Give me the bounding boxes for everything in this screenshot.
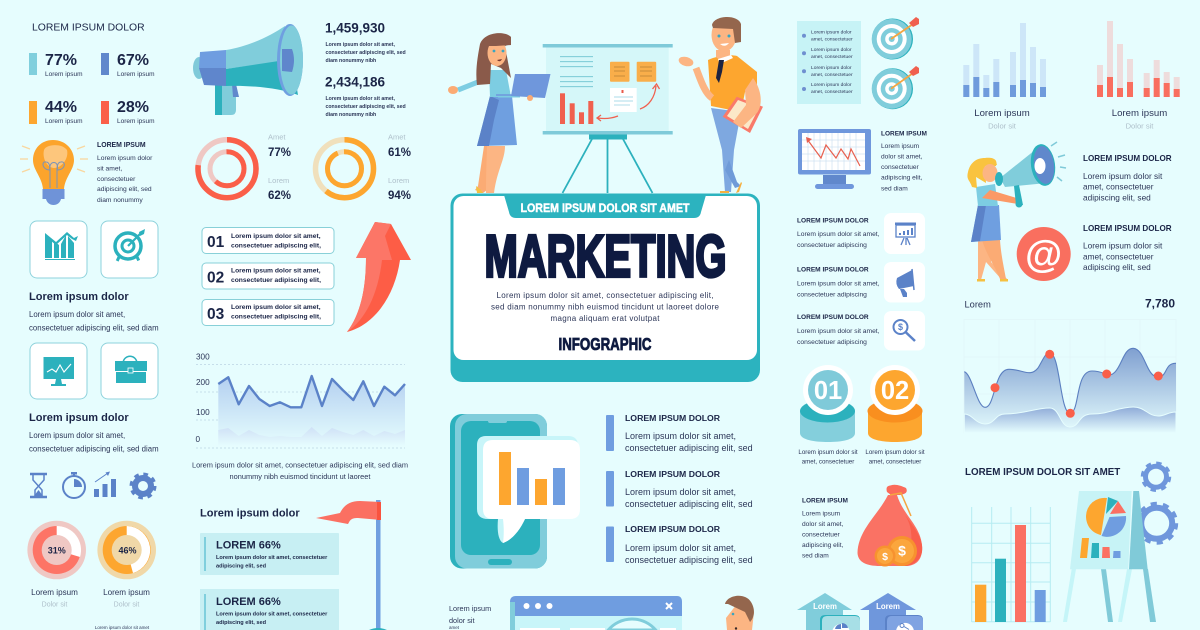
chart: red bars: Lorem ipsum bbox=[1112, 108, 1167, 119]
illustration: woman with megaphone bbox=[967, 142, 1066, 282]
text item 2: Lorem ipsum dolor sit amet, bbox=[625, 487, 736, 497]
text: right block 1 bbox=[1083, 154, 1172, 202]
label: lorem value: 7,780 bbox=[1145, 296, 1175, 310]
text: line chart caption: nonummy nibh euismod tincidunt ut laoreet bbox=[230, 472, 370, 481]
text: lorem ipsum dolor block 2: Lorem ipsum dolor sit amet, bbox=[29, 431, 125, 440]
heading: MARKETING: MARKETING bbox=[484, 222, 726, 290]
donut: 46%: Lorem ipsum bbox=[103, 588, 150, 597]
text: row 3: LOREM IPSUM DOLOR bbox=[797, 314, 869, 321]
icon: large megaphone bbox=[193, 24, 303, 115]
text: row 3: consectetuer adipiscing bbox=[797, 339, 867, 346]
badge: 02: amet, consectetuer bbox=[869, 458, 921, 466]
icon: house right bbox=[860, 593, 923, 630]
icon: hourglass bbox=[30, 474, 47, 497]
callout: lorem 66% second: LOREM 66% bbox=[216, 596, 281, 608]
badge: 01 bbox=[798, 365, 858, 466]
text item 1 bbox=[606, 413, 753, 453]
text: right block 2: adipiscing elit, sed bbox=[1083, 262, 1151, 272]
text: right block 2: LOREM IPSUM DOLOR bbox=[1083, 224, 1172, 233]
panel: key percentages bbox=[29, 22, 155, 125]
stat: 1,459,930: diam nonummy nibh bbox=[326, 58, 376, 64]
text: lorem ipsum monitor: sed diam bbox=[881, 186, 908, 192]
text item 2: consectetuer adipiscing elit, sed bbox=[625, 499, 753, 509]
text: right block 2: Lorem ipsum dolor sit bbox=[1083, 240, 1163, 250]
heading: INFOGRAPHIC: INFOGRAPHIC bbox=[558, 334, 652, 354]
donut: 46%: Dolor sit bbox=[114, 602, 139, 608]
text: lorem ipsum dolor block 2: consectetuer adipiscing elit, sed diam bbox=[29, 444, 159, 454]
list: bullet panel: Lorem ipsum dolor bbox=[811, 30, 852, 36]
text: lorem ipsum money: Lorem ipsum bbox=[802, 510, 841, 518]
badge: 01: Lorem ipsum dolor sit bbox=[798, 449, 858, 456]
text: lorem ipsum money: adipiscing elit, bbox=[802, 542, 844, 549]
stat 67% bbox=[101, 52, 155, 78]
text: lorem ipsum monitor: LOREM IPSUM bbox=[881, 130, 927, 138]
text: lorem ipsum bulb: diam nonummy bbox=[97, 197, 143, 204]
chart: line chart: 200 bbox=[196, 378, 210, 387]
text: lorem ipsum dolor block 2: Lorem ipsum dolor bbox=[29, 412, 129, 424]
icon: gear bbox=[132, 474, 154, 498]
list: bullet panel: amet, consectetuer bbox=[811, 54, 853, 60]
text: lorem ipsum money: consectetuer bbox=[802, 532, 841, 538]
donut: 46%: 46% bbox=[118, 546, 137, 556]
text: lorem ipsum monitor: dolor sit amet, bbox=[881, 154, 923, 160]
icon: rising bars bbox=[94, 472, 116, 497]
text: description: Lorem ipsum dolor sit amet, consectetuer adipiscing elit, bbox=[496, 291, 714, 300]
list: bullet panel: Lorem ipsum dolor bbox=[811, 82, 852, 88]
text: lorem ipsum bulb: Lorem ipsum dolor bbox=[97, 155, 153, 162]
text: lorem ipsum dolor block 2 bbox=[29, 412, 159, 454]
text: bottom lorem: Lorem ipsum bbox=[449, 604, 491, 613]
arrow: rising red bbox=[347, 222, 411, 332]
labels: red donut bbox=[268, 132, 291, 202]
text: row 2 bbox=[797, 266, 880, 298]
text item 1: Lorem ipsum dolor sit amet, bbox=[625, 431, 736, 441]
illustration: woman with laptop bbox=[448, 33, 550, 193]
icon: at sign bbox=[1017, 227, 1071, 281]
text: row 2: consectetuer adipiscing bbox=[797, 292, 867, 298]
illustration: easel with pie chart bbox=[1063, 491, 1156, 622]
list item 01 bbox=[202, 228, 334, 254]
text: row 1: Lorem ipsum dolor sit amet, bbox=[797, 231, 880, 238]
heading: lorem ipsum dolor sit amet: LOREM IPSUM DOLOR SIT AMET bbox=[965, 467, 1120, 478]
text: lorem ipsum monitor: Lorem ipsum bbox=[881, 143, 920, 150]
stat: 1,459,930: consectetuer adipiscing elit, sed bbox=[326, 50, 406, 56]
label: lorem value: Lorem bbox=[964, 300, 991, 310]
illustration: presentation board bbox=[543, 44, 673, 193]
text: lorem ipsum monitor: consectetuer bbox=[881, 164, 920, 171]
list item 03 bbox=[202, 300, 334, 326]
stat 28%: 28% bbox=[117, 99, 149, 116]
icon card: dollar magnifier bbox=[884, 311, 925, 350]
donut: 31%: Lorem ipsum bbox=[31, 588, 78, 597]
list: bullet panel: Lorem ipsum dolor bbox=[811, 47, 852, 53]
list item 03: Lorem ipsum dolor sit amet, bbox=[231, 304, 321, 311]
text: lorem ipsum bulb: adipiscing elit, sed bbox=[97, 186, 152, 193]
text: lorem ipsum monitor bbox=[881, 130, 927, 192]
text: row 2: LOREM IPSUM DOLOR bbox=[797, 266, 869, 274]
icon card: briefcase bbox=[101, 343, 158, 399]
text: lorem ipsum money: sed diam bbox=[802, 552, 829, 560]
list item 03: 03 bbox=[207, 306, 225, 323]
list: bullet panel: amet, consectetuer bbox=[811, 36, 853, 42]
chart: line chart: 0 bbox=[196, 435, 200, 444]
text: lorem ipsum monitor: adipiscing elit, bbox=[881, 174, 923, 182]
text: right block 1: LOREM IPSUM DOLOR bbox=[1083, 154, 1172, 163]
callout: lorem 66% first: LOREM 66% bbox=[216, 540, 281, 552]
icon: money bag bbox=[858, 485, 922, 566]
icon: house left: Lorem bbox=[813, 602, 837, 611]
icon: dartboard bottom bbox=[872, 66, 919, 109]
text item 1: LOREM IPSUM DOLOR bbox=[625, 413, 721, 423]
list item 01: Lorem ipsum dolor sit amet, bbox=[231, 233, 321, 240]
icon: money bag: $ bbox=[882, 551, 888, 563]
banner: subtitle ribbon bbox=[504, 195, 706, 218]
illustration: man with book bbox=[678, 17, 763, 193]
list item 02 bbox=[202, 263, 334, 289]
icon card: megaphone bbox=[884, 262, 925, 302]
illustration: man head bbox=[725, 596, 754, 630]
list: bullet panel: amet, consectetuer bbox=[811, 72, 853, 78]
text: row 3: Lorem ipsum dolor sit amet, bbox=[797, 328, 880, 335]
text item 3: LOREM IPSUM DOLOR bbox=[625, 524, 721, 534]
stat 28%: Lorem ipsum bbox=[117, 118, 155, 125]
text: bottom lorem: dolor sit bbox=[449, 616, 475, 625]
text item 3: consectetuer adipiscing elit, sed bbox=[625, 555, 753, 565]
icon: phone with chart bubble bbox=[450, 414, 580, 568]
chart: red bars bbox=[1097, 21, 1180, 130]
badge: 02: 02 bbox=[881, 377, 909, 405]
labels: orange donut: 94% bbox=[388, 190, 411, 202]
chart: smooth area with markers bbox=[964, 320, 1176, 433]
stat 44%: 44% bbox=[45, 99, 77, 116]
chart: blue bars: Dolor sit bbox=[988, 122, 1017, 130]
illustration: browser window bbox=[510, 596, 682, 630]
text: row 1: consectetuer adipiscing bbox=[797, 242, 867, 249]
text: description: sed diam nonummy nibh euismod tincidunt ut laoreet dolore bbox=[491, 302, 720, 312]
text: lorem ipsum bulb: consectetuer bbox=[97, 176, 136, 183]
chart: red concentric donut bbox=[198, 140, 256, 198]
stat: 1,459,930 bbox=[325, 20, 406, 64]
text item 3 bbox=[606, 524, 753, 565]
text: description bbox=[491, 291, 720, 323]
stat: 2,434,186: Lorem ipsum dolor sit amet, bbox=[326, 96, 396, 102]
list: bullet panel: Lorem ipsum dolor bbox=[811, 65, 852, 71]
text: line chart caption: Lorem ipsum dolor sit amet, consectetuer adipiscing elit, sed diam bbox=[192, 460, 408, 470]
stat: 2,434,186: 2,434,186 bbox=[325, 74, 386, 90]
text: lorem ipsum money: LOREM IPSUM bbox=[802, 498, 848, 504]
icon: stopwatch bbox=[63, 472, 85, 498]
callout: lorem 66% first: Lorem ipsum dolor sit amet, consectetuer bbox=[216, 555, 328, 561]
list item 02: consectetuer adipiscing elit, bbox=[231, 277, 321, 284]
icon: light bulb bbox=[20, 140, 88, 205]
stat 77%: 77% bbox=[45, 52, 77, 69]
callout: lorem 66% first bbox=[200, 533, 339, 575]
stat 77% bbox=[29, 52, 83, 78]
labels: orange donut: Lorem bbox=[388, 176, 409, 185]
stat: 1,459,930: 1,459,930 bbox=[325, 20, 385, 36]
stat 67%: Lorem ipsum bbox=[117, 71, 155, 78]
text: lorem ipsum bulb: LOREM IPSUM bbox=[97, 142, 146, 149]
text: lorem ipsum bulb bbox=[97, 142, 153, 204]
text: row 1: LOREM IPSUM DOLOR bbox=[797, 218, 869, 224]
labels: orange donut bbox=[388, 132, 411, 202]
text: bottom lorem: amet bbox=[449, 625, 460, 630]
stat 77%: Lorem ipsum bbox=[45, 71, 83, 78]
icon row: time and tools bbox=[30, 472, 154, 498]
text: lorem ipsum dolor block 1 bbox=[29, 291, 159, 332]
text: clipped caption: Lorem ipsum dolor sit amet bbox=[95, 625, 150, 630]
text: row 2: Lorem ipsum dolor sit amet, bbox=[797, 280, 880, 288]
donut: 31% bbox=[27, 521, 86, 608]
callout: lorem 66% second: Lorem ipsum dolor sit amet, consectetuer bbox=[216, 612, 328, 618]
stat: 2,434,186 bbox=[325, 74, 406, 118]
list item 01: 01 bbox=[207, 234, 225, 251]
donut: 46% bbox=[97, 521, 156, 608]
icon card: presentation bbox=[884, 213, 925, 254]
icon: flag on pole bbox=[316, 500, 387, 630]
callout: lorem 66% second: adipiscing elit, sed bbox=[216, 620, 267, 626]
chart: blue bars: Lorem ipsum bbox=[974, 108, 1030, 119]
text item 1: consectetuer adipiscing elit, sed bbox=[625, 443, 753, 453]
stat: 1,459,930: Lorem ipsum dolor sit amet, bbox=[326, 42, 396, 48]
text: line chart caption bbox=[192, 460, 408, 481]
chart: blue bars bbox=[963, 23, 1046, 130]
text: lorem ipsum bulb: sit amet, bbox=[97, 166, 122, 172]
labels: red donut: Lorem bbox=[268, 176, 289, 185]
text: right block 2: amet, consectetuer bbox=[1083, 252, 1154, 262]
heading: flag section: Lorem ipsum dolor bbox=[200, 508, 300, 520]
labels: red donut: Amet bbox=[268, 132, 286, 142]
labels: orange donut: 61% bbox=[388, 147, 411, 159]
icon card: growth chart bbox=[30, 221, 87, 278]
callout: lorem 66% first: adipiscing elit, sed bbox=[216, 564, 267, 570]
labels: red donut: 77% bbox=[268, 147, 291, 159]
list: bullet panel bbox=[797, 21, 861, 104]
icon: monitor with falling chart bbox=[798, 129, 871, 189]
chart: line chart bbox=[196, 352, 405, 448]
stat: 2,434,186: consectetuer adipiscing elit, sed bbox=[326, 104, 406, 110]
badge: 01: 01 bbox=[814, 377, 842, 405]
list item 01: consectetuer adipiscing elit, bbox=[231, 242, 321, 250]
text: lorem ipsum dolor block 1: consectetuer adipiscing elit, sed diam bbox=[29, 324, 159, 332]
icon: house left bbox=[797, 593, 860, 630]
labels: red donut: 62% bbox=[268, 190, 291, 202]
list item 03: consectetuer adipiscing elit, bbox=[231, 314, 321, 320]
text: right block 1: amet, consectetuer bbox=[1083, 182, 1154, 192]
chart: line chart: 300 bbox=[196, 352, 210, 362]
text: right block 1: Lorem ipsum dolor sit bbox=[1083, 171, 1163, 181]
text: lorem ipsum money: dolor sit amet, bbox=[802, 521, 844, 528]
icon: money bag: $ bbox=[898, 542, 906, 558]
list item 02: Lorem ipsum dolor sit amet, bbox=[231, 268, 321, 274]
icon: at sign: @ bbox=[1025, 234, 1062, 276]
text: right block 1: adipiscing elit, sed bbox=[1083, 192, 1151, 202]
icon: dartboard top bbox=[872, 17, 919, 60]
icon card: dollar magnifier: $ bbox=[898, 322, 903, 332]
heading: lorem ipsum dolor: LOREM IPSUM DOLOR bbox=[32, 22, 145, 34]
stat: 2,434,186: diam nonummy nibh bbox=[326, 112, 376, 118]
badge: 02: Lorem ipsum dolor sit bbox=[865, 449, 925, 456]
text: lorem ipsum dolor block 1: Lorem ipsum dolor sit amet, bbox=[29, 310, 125, 319]
banner: subtitle ribbon: LOREM IPSUM DOLOR SIT AMET bbox=[520, 201, 690, 215]
text: lorem ipsum money bbox=[802, 498, 848, 560]
badge: 02 bbox=[865, 365, 925, 466]
chart: red bars: Dolor sit bbox=[1126, 122, 1154, 130]
stat 44%: Lorem ipsum bbox=[45, 118, 83, 125]
text: right block 2 bbox=[1083, 224, 1172, 272]
callout: lorem 66% second bbox=[200, 589, 339, 630]
text item 2: LOREM IPSUM DOLOR bbox=[625, 469, 721, 479]
donut: 31%: 31% bbox=[48, 546, 66, 556]
list: bullet panel: amet, consectetuer bbox=[811, 89, 853, 95]
icon card: target bbox=[101, 221, 158, 278]
text: bottom lorem bbox=[449, 604, 491, 630]
text: lorem ipsum dolor block 1: Lorem ipsum dolor bbox=[29, 291, 129, 303]
icon: gears bbox=[1137, 463, 1176, 543]
stat 28% bbox=[101, 99, 155, 125]
stat 44% bbox=[29, 99, 83, 125]
text: description: magna aliquam erat volutpat bbox=[550, 314, 660, 323]
chart: grid bar chart bbox=[972, 507, 1050, 622]
text: row 3 bbox=[797, 314, 880, 346]
panel: marketing title card bbox=[450, 194, 760, 382]
chart: orange concentric donut bbox=[316, 140, 374, 198]
stat 67%: 67% bbox=[117, 52, 149, 69]
list item 02: 02 bbox=[207, 270, 224, 286]
pie chart bbox=[1086, 497, 1126, 537]
labels: orange donut: Amet bbox=[388, 132, 406, 142]
text: row 1 bbox=[797, 218, 880, 249]
icon: house right: Lorem bbox=[876, 602, 900, 611]
donut: 31%: Dolor sit bbox=[42, 602, 67, 608]
icon card: monitor bbox=[30, 343, 87, 399]
chart: line chart: 100 bbox=[196, 408, 210, 417]
text item 3: Lorem ipsum dolor sit amet, bbox=[625, 543, 736, 553]
badge: 01: amet, consectetuer bbox=[802, 458, 854, 466]
text item 2 bbox=[606, 469, 753, 509]
label: lorem value bbox=[964, 296, 1175, 310]
